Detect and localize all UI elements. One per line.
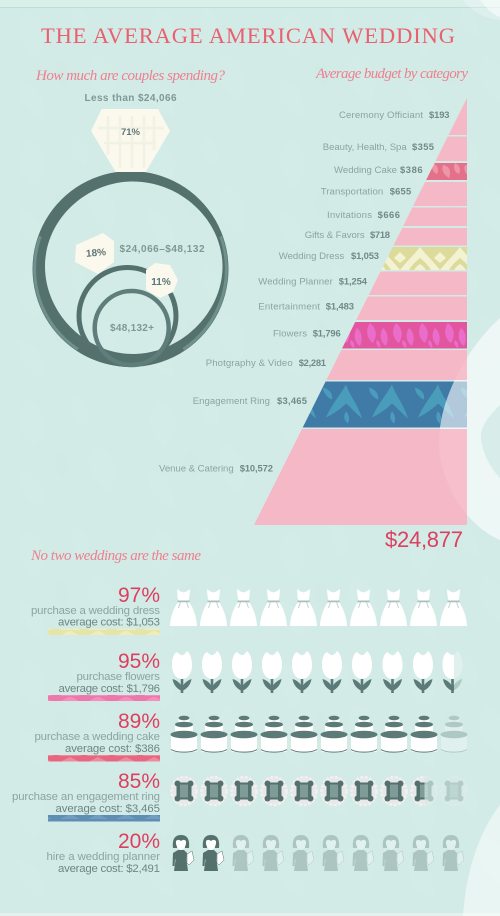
stat text: purchase flowers [76,671,160,683]
bracket label: low: Less than $24,066 [84,93,177,104]
title: THE AVERAGE AMERICAN WEDDING [41,23,455,48]
stat text: average cost: $386 [65,743,160,755]
pyramid labels: Gifts & Favors [305,230,365,241]
medium diamond: 18% [86,247,107,260]
band: invitations [403,208,467,226]
medium diamond [75,233,114,274]
small diamond [146,263,178,298]
stat text: average cost: $2,491 [58,863,160,875]
heading: how much are couples spending: How much are couples spending? [35,68,226,84]
pyramid labels: Wedding Dress [279,251,344,262]
ring chart: spending brackets [33,93,229,367]
stat text: purchase a wedding cake [34,731,160,743]
row: flowers [48,650,462,701]
pyramid labels: $666 [378,209,400,220]
large diamond [91,109,170,172]
pyramid labels: $1,053 [351,250,379,261]
pyramid labels: $355 [412,141,434,152]
pyramid labels: $386 [400,164,423,175]
band: engagement ring [303,382,467,428]
pyramid labels: $2,281 [299,357,326,368]
stat text [46,830,160,875]
pyramid labels: Flowers [273,328,307,340]
row: wedding dress [31,584,467,635]
icons: planners [172,835,464,871]
medium ring [79,268,176,364]
pyramid labels: Wedding Cake [334,165,397,176]
bracket label: high: $48,132+ [110,323,154,334]
large ring highlight [35,236,226,349]
band: transportation [413,182,467,206]
heading: no two weddings: No two weddings are the same [30,548,201,564]
stat text [48,650,160,701]
band: ceremony officiant [448,98,467,135]
pyramid labels: $718 [370,229,390,240]
row: wedding cake [34,710,468,762]
pyramid labels [159,109,450,474]
large diamond: 71% [121,127,141,138]
pyramid labels: $655 [390,186,411,196]
stat text: average cost: $1,053 [58,616,160,628]
wave tint over pyramid [440,382,467,428]
stat text: 20% [118,830,160,853]
bracket label: middle: $24,066–$48,132 [120,244,205,255]
pyramid labels: $1,483 [326,300,354,312]
band: wedding cake [426,163,467,180]
icons: dresses [170,589,467,626]
stat text [31,584,160,635]
pyramid labels: Invitations [327,210,372,221]
large ring [33,171,229,367]
band: venue [254,429,467,525]
icons: tulips [172,651,462,693]
row: engagement ring [12,770,466,822]
icons: gems [172,777,466,805]
small ring [95,291,169,365]
pyramid labels: Ceremony Officiant [339,110,423,121]
pyramid labels: Beauty, Health, Spa [323,142,407,153]
stat text: purchase a wedding dress [31,605,160,617]
stat text: 89% [118,710,160,733]
band: wedding planner [369,272,467,295]
stat text: hire a wedding planner [46,851,160,863]
stat text: 95% [118,650,160,673]
band: flowers [342,322,467,348]
band: photography [326,350,467,380]
pyramid labels: Engagement Ring [193,396,270,407]
band: beauty [436,136,467,161]
pyramid labels: $10,572 [240,462,273,474]
pyramid labels: Wedding Planner [258,276,334,288]
pyramid labels: Venue & Catering [159,464,234,474]
small diamond: 11% [151,277,171,288]
row: wedding planner [46,830,464,875]
pyramid labels: Entertainment [258,302,320,312]
total: $24,877 [385,527,463,552]
pyramid chart: budget by category [254,98,467,525]
stat text: 97% [118,584,160,607]
band: gifts [394,228,467,246]
stat text: 85% [118,770,160,793]
stat text: average cost: $3,465 [56,803,160,815]
pyramid labels: Transportation [321,186,383,198]
band: wedding dress [381,247,467,270]
pyramid labels: $1,796 [313,328,341,338]
heading: average budget by category: Average budget by category [315,66,468,82]
pyramid labels: $193 [429,109,450,120]
stat text [12,770,160,822]
pyramid labels: $3,465 [277,395,307,406]
stat text [34,710,160,762]
stat text: average cost: $1,796 [58,683,160,695]
stat text: purchase an engagement ring [12,791,160,803]
band: entertainment [356,296,467,320]
icons: cakes [170,716,468,752]
pyramid labels: Photgraphy & Video [206,358,293,369]
pyramid labels: $1,254 [339,276,368,286]
